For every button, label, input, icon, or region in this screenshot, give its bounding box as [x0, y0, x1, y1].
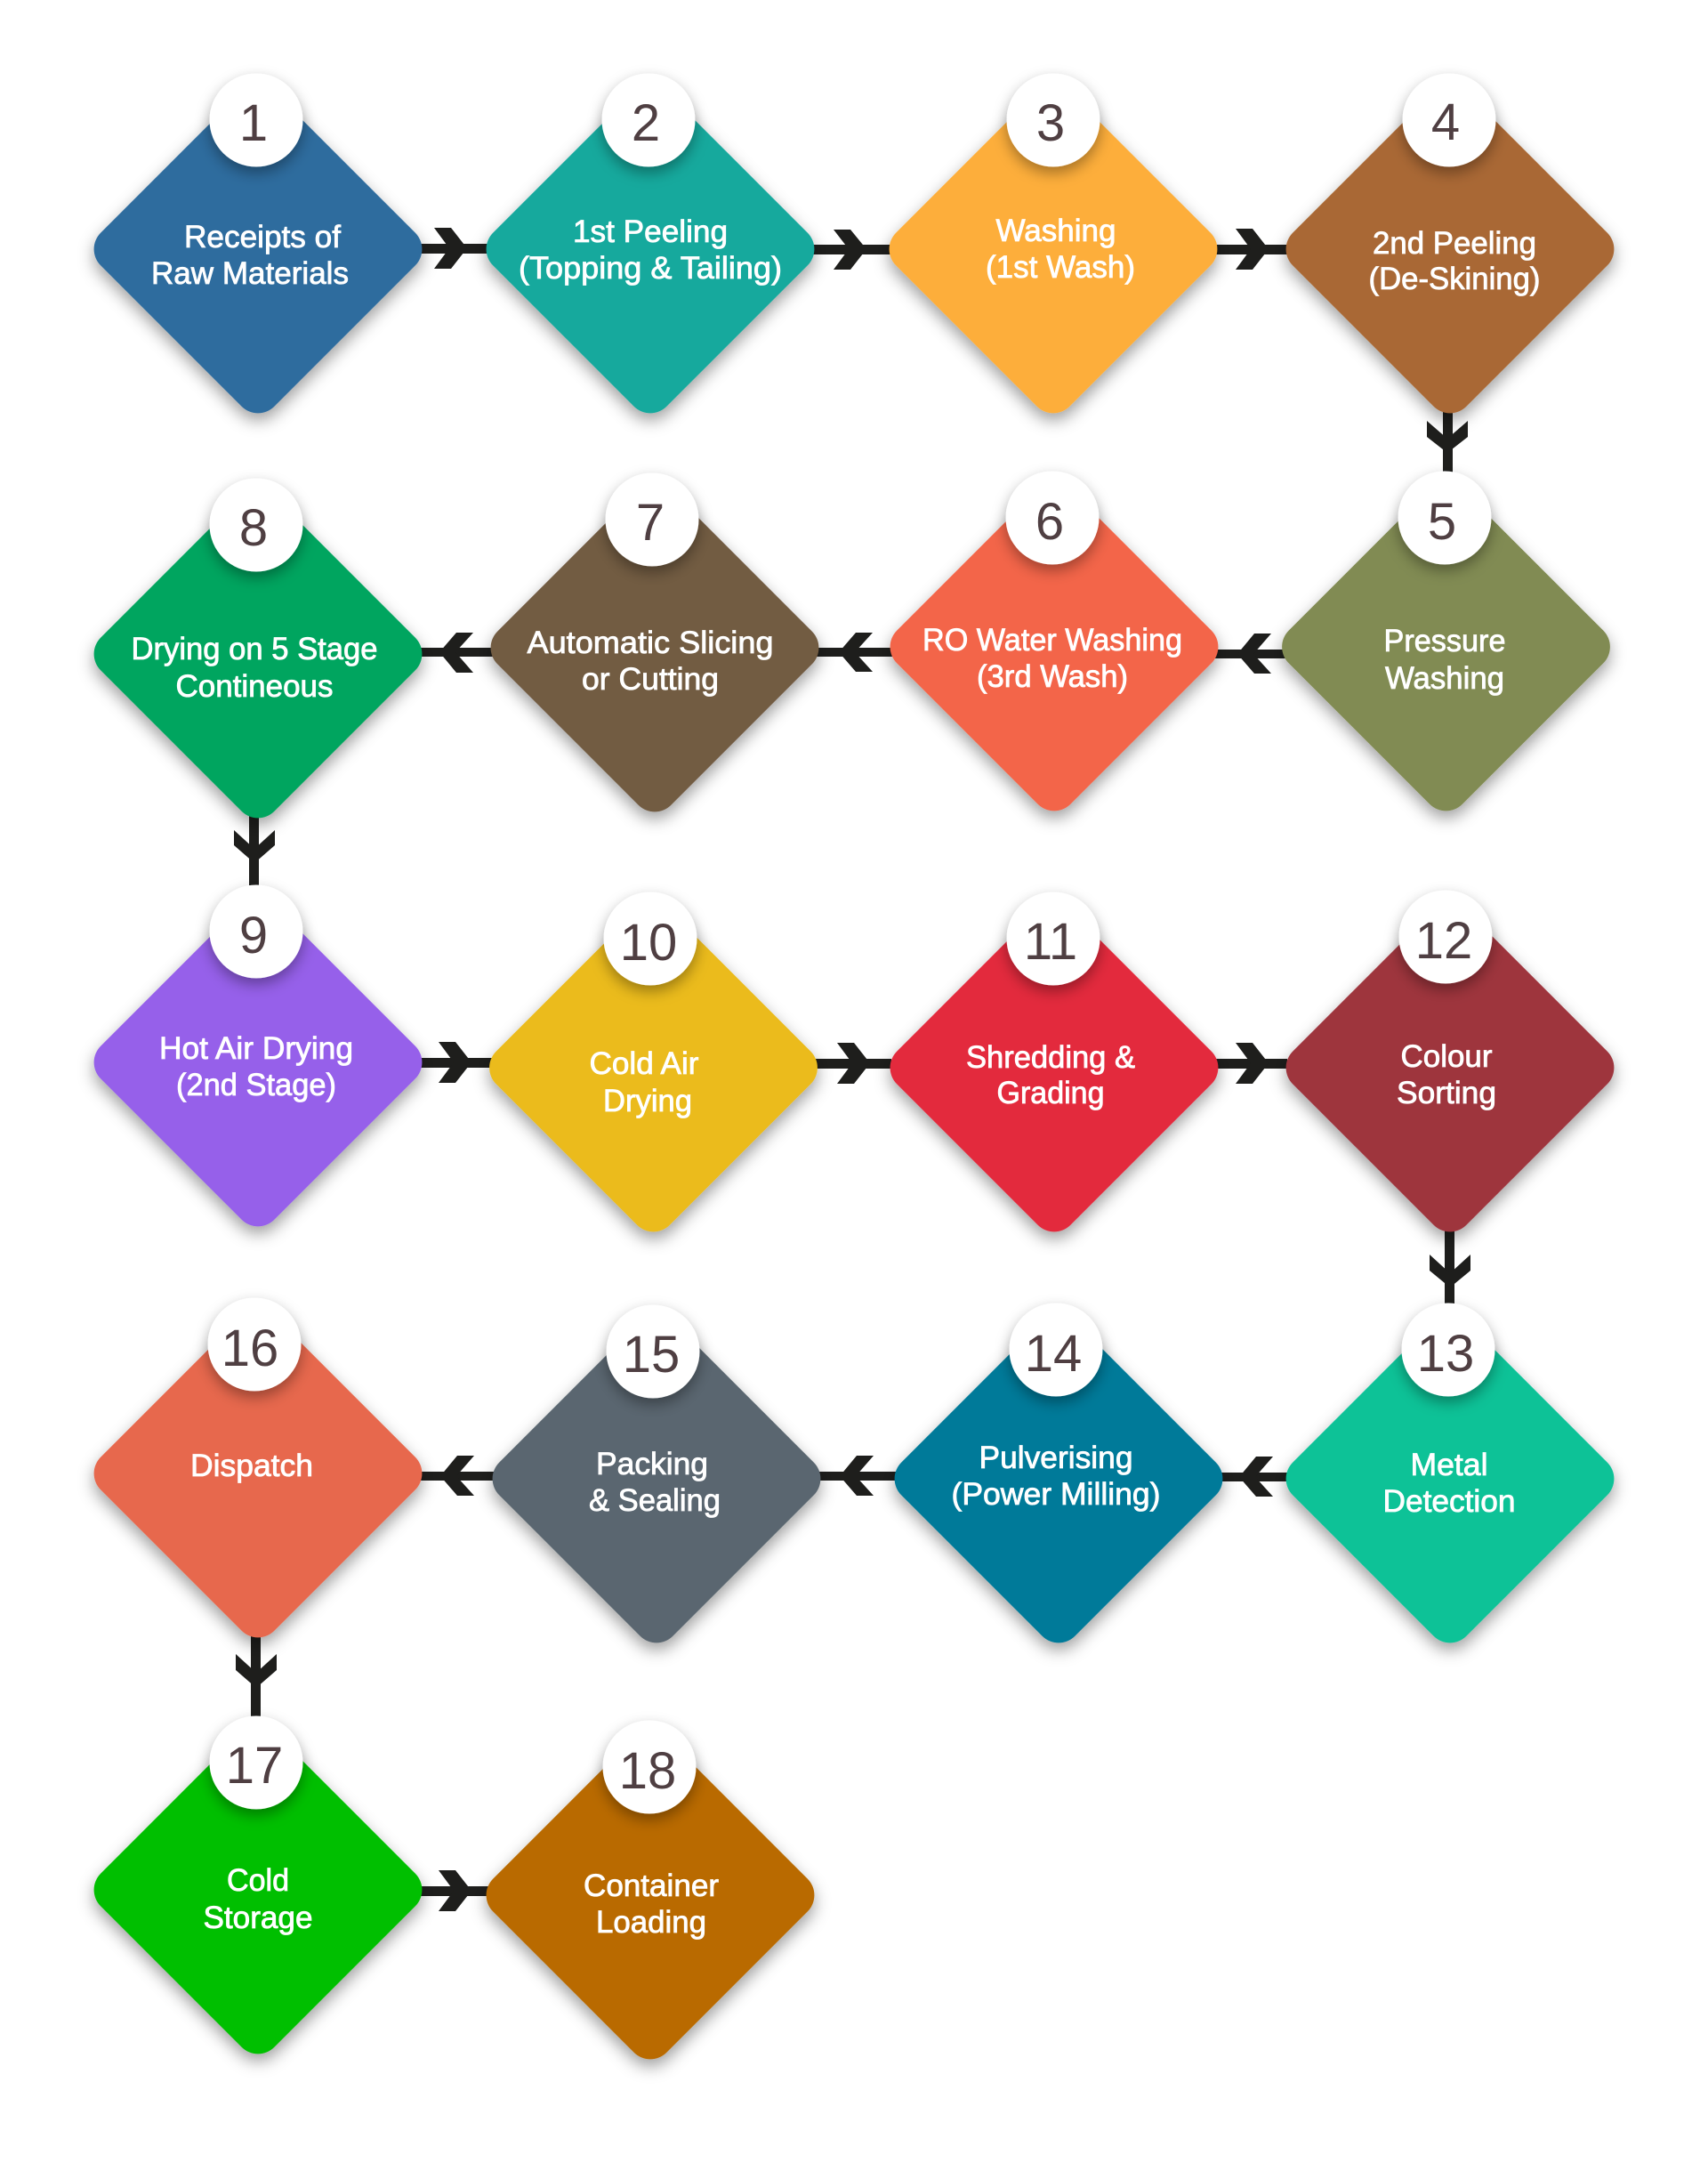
step 17: Cold Storage: [85, 1715, 431, 2063]
step 2: 1st Peeling: 2: [632, 94, 660, 152]
step 9: Hot Air Drying: [85, 884, 431, 1236]
step 6: RO Water Washing: [881, 472, 1228, 820]
arrow: step 17 to 18: [418, 1870, 494, 1911]
arrow: step 2 to 3: [811, 230, 891, 270]
step 12: Colour Sorting: Sorting: [1397, 1076, 1496, 1110]
step 2: 1st Peeling: [477, 73, 824, 423]
step 3: Washing: [880, 73, 1227, 423]
step 11: Shredding and Grading: 11: [1024, 913, 1077, 971]
step 4: 2nd Peeling: 2nd Peeling: [1373, 226, 1536, 261]
step 2: 1st Peeling: (Topping & Tailing): [519, 251, 782, 286]
step 12: Colour Sorting: Colour: [1400, 1039, 1493, 1074]
step 6: RO Water Washing: (3rd Wash): [977, 659, 1128, 694]
step 9: Hot Air Drying: 9: [239, 907, 268, 964]
arrow: step 9 to 10: [418, 1042, 494, 1083]
step 1: Receipts of Raw Materials: Raw Materials: [151, 256, 349, 291]
step 15: Packing and Sealing: 15: [623, 1326, 680, 1384]
step 5: Pressure Washing: Pressure: [1384, 624, 1505, 658]
step 8: Drying on 5 Stage: Drying on 5 Stage: [132, 632, 377, 666]
arrow: step 3 to 4: [1214, 229, 1287, 270]
step 16: Dispatch: 16: [222, 1320, 278, 1377]
arrow: step 16 to 17: [236, 1633, 277, 1717]
step 15: Packing and Sealing: [483, 1304, 830, 1652]
step 10: Cold Air Drying: 10: [620, 914, 677, 972]
step 11: Shredding and Grading: [881, 892, 1228, 1241]
step 13: Metal Detection: Metal: [1411, 1448, 1487, 1482]
step 2: 1st Peeling: 1st Peeling: [573, 214, 728, 249]
step 11: Shredding and Grading: Grading: [996, 1076, 1105, 1110]
step 14: Pulverising: 14: [1025, 1325, 1082, 1383]
arrow: step 6 to 7: [814, 633, 894, 672]
arrow: step 1 to 2: [418, 228, 489, 269]
step 13: Metal Detection: 13: [1417, 1325, 1474, 1383]
step 11: Shredding and Grading: Shredding &: [966, 1040, 1135, 1075]
arrow: step 13 to 14: [1219, 1457, 1290, 1497]
step 10: Cold Air Drying: Drying: [603, 1084, 692, 1118]
step 3: Washing: Washing: [996, 214, 1116, 248]
step 15: Packing and Sealing: & Sealing: [589, 1483, 721, 1518]
step 1: Receipts of Raw Materials: [85, 73, 431, 423]
step 15: Packing and Sealing: Packing: [596, 1447, 708, 1481]
step 14: Pulverising: (Power Milling): [952, 1477, 1160, 1512]
step 4: 2nd Peeling: (De-Skining): [1368, 262, 1541, 296]
arrow: step 12 to 13: [1430, 1228, 1470, 1308]
step 5: Pressure Washing: Washing: [1385, 661, 1504, 696]
step 1: Receipts of Raw Materials: 1: [239, 94, 268, 152]
step 14: Pulverising: Pulverising: [979, 1441, 1133, 1475]
step 17: Cold Storage: 17: [226, 1737, 283, 1795]
step 4: 2nd Peeling: 4: [1431, 93, 1460, 151]
step 3: Washing: (1st Wash): [986, 250, 1135, 285]
step 16: Dispatch: [85, 1297, 431, 1647]
step 18: Container Loading: Container: [584, 1868, 719, 1903]
step 6: RO Water Washing: 6: [1035, 493, 1064, 551]
step 17: Cold Storage: Storage: [203, 1901, 313, 1935]
step 3: Washing: 3: [1036, 94, 1065, 152]
step 7: Automatic Slicing: [481, 473, 828, 821]
step 8: Drying on 5 Stage: Contineous: [176, 669, 333, 704]
step 13: Metal Detection: [1277, 1303, 1623, 1652]
step 12: Colour Sorting: [1277, 890, 1623, 1241]
arrow: step 5 to 6: [1214, 634, 1285, 674]
arrow: step 15 to 16: [414, 1456, 495, 1496]
step 17: Cold Storage: Cold: [227, 1863, 289, 1898]
arrow: step 11 to 12: [1214, 1043, 1287, 1084]
step 7: Automatic Slicing: Automatic Slicing: [527, 625, 774, 660]
step 5: Pressure Washing: 5: [1428, 493, 1456, 551]
arrow: step 10 to 11: [811, 1043, 891, 1084]
step 16: Dispatch: Dispatch: [190, 1449, 313, 1483]
step 7: Automatic Slicing: or Cutting: [582, 662, 719, 697]
step 9: Hot Air Drying: Hot Air Drying: [159, 1031, 353, 1066]
step 5: Pressure Washing: [1272, 472, 1620, 820]
step 10: Cold Air Drying: [479, 892, 827, 1241]
step 18: Container Loading: 18: [619, 1742, 676, 1800]
step 8: Drying on 5 Stage: 8: [239, 499, 268, 557]
step 10: Cold Air Drying: Cold Air: [589, 1046, 699, 1081]
step 1: Receipts of Raw Materials: Receipts of: [184, 220, 341, 254]
step 6: RO Water Washing: RO Water Washing: [922, 623, 1182, 658]
step 13: Metal Detection: Detection: [1382, 1484, 1516, 1519]
step 18: Container Loading: Loading: [596, 1905, 706, 1940]
step 8: Drying on 5 Stage: [85, 479, 431, 827]
step 14: Pulverising: [885, 1303, 1232, 1652]
arrow: step 4 to 5: [1427, 409, 1468, 473]
arrow: step 7 to 8: [414, 633, 494, 673]
step 18: Container Loading: [477, 1721, 824, 2069]
step 9: Hot Air Drying: (2nd Stage): [176, 1068, 336, 1102]
arrow: step 14 to 15: [814, 1456, 896, 1496]
step 7: Automatic Slicing: 7: [636, 494, 665, 552]
arrow: step 8 to 9: [234, 814, 275, 885]
step 4: 2nd Peeling: [1277, 73, 1623, 423]
step 12: Colour Sorting: 12: [1415, 912, 1472, 970]
